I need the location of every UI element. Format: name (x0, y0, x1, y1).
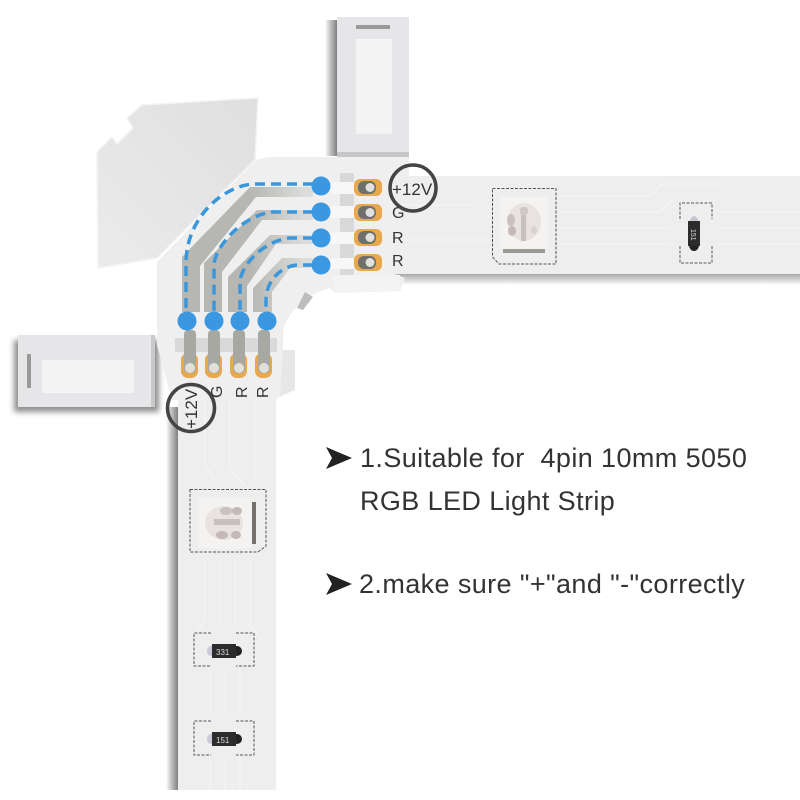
pin labels bottom: R (234, 386, 251, 398)
resistor 151: 151 (216, 736, 230, 745)
top connector lid (325, 17, 409, 157)
white pin tabs (330, 182, 360, 269)
blue dashed wiring lines (186, 184, 313, 312)
note 2 text: 2.make sure "+"and "-"correctly (359, 569, 745, 599)
left connector lid (14, 335, 159, 412)
pin labels bottom: R (255, 386, 272, 398)
pin labels bottom: G (209, 386, 226, 398)
resistor 151 on horizontal strip (680, 203, 712, 263)
LED chip with dashed outline (492, 188, 556, 264)
pin labels bottom: +12V (182, 388, 201, 429)
resistor 151 (194, 721, 254, 755)
copper pads top (354, 179, 382, 271)
pin labels bottom (182, 386, 272, 429)
highlight circle bottom +12V (168, 384, 214, 432)
diagonal connector lid (97, 98, 258, 268)
pin labels top: R (392, 253, 404, 270)
resistor 331 (194, 633, 254, 666)
highlight circle top +12V (390, 165, 436, 211)
bullet arrow 1 (326, 447, 352, 469)
LED chip with dashed outline (190, 490, 266, 552)
L-shaped connector body (157, 157, 409, 400)
copper pads bottom (181, 330, 272, 378)
silver conductor traces (182, 187, 313, 312)
resistor 331: 331 (216, 648, 230, 657)
pin labels top: G (392, 205, 404, 222)
note 1 text (360, 443, 747, 516)
resistor 151 on horizontal strip: 151 (689, 229, 696, 241)
bullet arrow 2 (326, 573, 352, 595)
horizontal LED strip (350, 176, 800, 285)
blue dots bottom (178, 312, 276, 330)
pin labels top: R (392, 230, 404, 247)
vertical LED strip (166, 345, 276, 790)
pin labels top: +12V (392, 180, 433, 199)
note 1 text: RGB LED Light Strip (360, 486, 615, 516)
pin labels top (392, 180, 433, 270)
blue dots top (312, 176, 330, 274)
note 1 text: 1.Suitable for 4pin 10mm 5050 (360, 443, 747, 473)
inner corner window (297, 292, 313, 310)
